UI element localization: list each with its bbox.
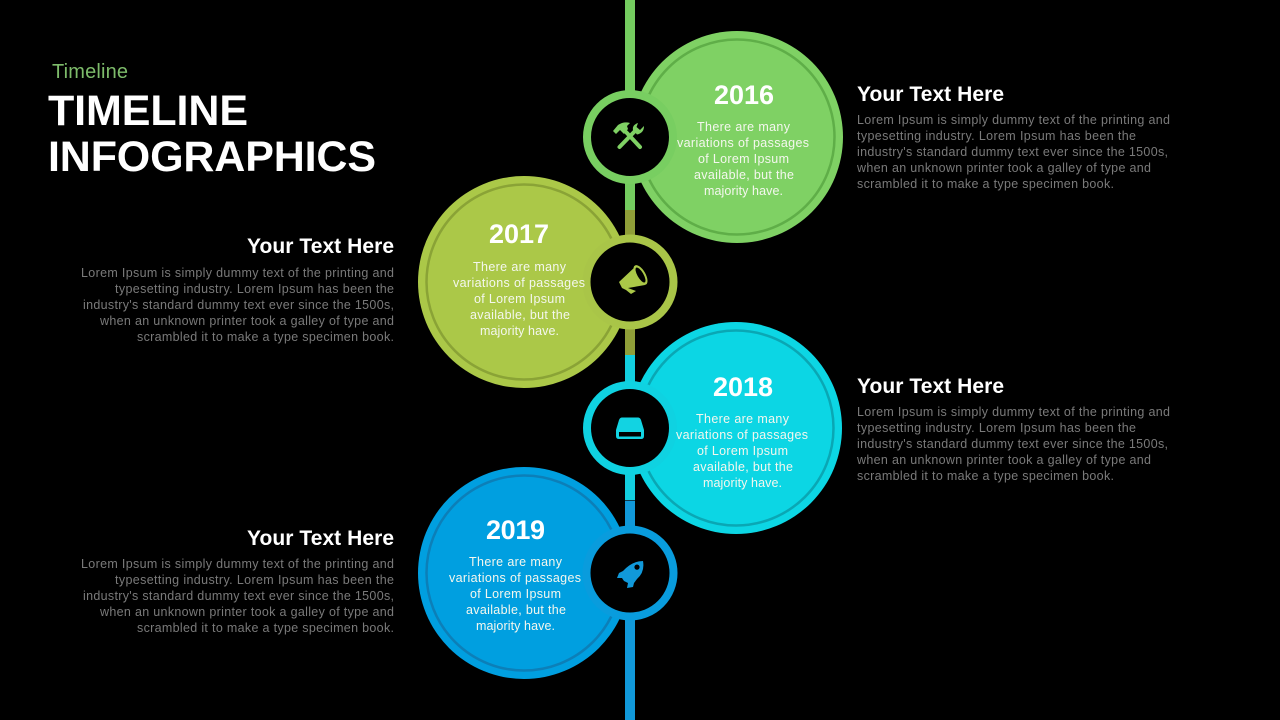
- circle text 2019: variations of passages: [449, 571, 581, 585]
- side text 2017: when an unknown printer took a galley of type and: [99, 314, 394, 328]
- side text 2018: Lorem Ipsum is simply dummy text of the printing and: [857, 405, 1170, 419]
- panel: 2016: [587, 31, 1170, 243]
- side text 2017: industry's standard dummy text ever since the 1500s,: [83, 298, 394, 312]
- large circle 2017: [418, 176, 630, 388]
- large circle 2016: [631, 31, 843, 243]
- icon: rocket: [617, 561, 643, 588]
- circle text 2018: variations of passages: [676, 428, 808, 442]
- circle text 2016: of Lorem Ipsum: [698, 152, 789, 166]
- eyebrow label: Timeline: [52, 61, 128, 83]
- icon ring 2016: [587, 94, 673, 180]
- icon ring 2019: [586, 530, 674, 616]
- side text 2016: Your Text Here: [857, 83, 1004, 106]
- circle text 2016: [677, 120, 809, 198]
- circle text 2017: majority have.: [480, 324, 559, 338]
- side text 2017: scrambled it to make a type specimen book.: [137, 330, 394, 344]
- circle text 2019: There are many: [469, 555, 563, 569]
- circle text 2017: variations of passages: [453, 276, 585, 290]
- circle text 2018: There are many: [696, 412, 790, 426]
- side text 2019: [81, 527, 394, 635]
- circle text 2018: [676, 412, 808, 490]
- circle text 2017: [453, 260, 585, 338]
- side text 2017: Your Text Here: [247, 235, 394, 258]
- side text 2016: typesetting industry. Lorem Ipsum has been the: [857, 129, 1136, 143]
- circle text 2019: majority have.: [476, 619, 555, 633]
- circle text 2017: There are many: [473, 260, 567, 274]
- circle text 2018: of Lorem Ipsum: [697, 444, 788, 458]
- year 2018: 2018: [713, 372, 773, 402]
- side text 2017: [81, 235, 394, 344]
- large circle 2018: [630, 322, 842, 534]
- large circle 2019: [418, 467, 630, 679]
- icon: storage drive: [616, 418, 644, 439]
- title block: INFOGRAPHICS: [48, 133, 376, 181]
- side text 2016: industry's standard dummy text ever since the 1500s,: [857, 145, 1168, 159]
- side text 2019: when an unknown printer took a galley of type and: [99, 605, 394, 619]
- side text 2016: scrambled it to make a type specimen book.: [857, 177, 1114, 191]
- side text 2017: Lorem Ipsum is simply dummy text of the printing and: [81, 266, 394, 280]
- side text 2019: scrambled it to make a type specimen book.: [137, 621, 394, 635]
- side text 2019: Lorem Ipsum is simply dummy text of the printing and: [81, 557, 394, 571]
- year 2017: 2017: [489, 219, 549, 249]
- year 2016: 2016: [714, 80, 774, 110]
- panel: 2018: [587, 322, 1170, 534]
- circle text 2016: majority have.: [704, 184, 783, 198]
- circle text 2016: available, but the: [694, 168, 794, 182]
- side text 2016: Lorem Ipsum is simply dummy text of the printing and: [857, 113, 1170, 127]
- side text 2018: typesetting industry. Lorem Ipsum has been the: [857, 421, 1136, 435]
- side text 2019: typesetting industry. Lorem Ipsum has been the: [115, 573, 394, 587]
- side text 2018: scrambled it to make a type specimen book.: [857, 469, 1114, 483]
- side text 2018: industry's standard dummy text ever since the 1500s,: [857, 437, 1168, 451]
- panel: 2019: [81, 467, 674, 679]
- icon ring 2018: [587, 385, 673, 471]
- side text 2019: Your Text Here: [247, 527, 394, 550]
- icon: megaphone: [619, 263, 650, 294]
- circle text 2016: There are many: [697, 120, 791, 134]
- circle text 2019: [449, 555, 581, 633]
- side text 2017: typesetting industry. Lorem Ipsum has been the: [115, 282, 394, 296]
- icon ring 2017: [586, 238, 674, 326]
- circle text 2017: available, but the: [470, 308, 570, 322]
- side text 2018: Your Text Here: [857, 375, 1004, 398]
- main heading: TIMELINE: [48, 87, 248, 135]
- circle text 2016: variations of passages: [677, 136, 809, 150]
- title block: [48, 61, 376, 181]
- panel: 2017: [81, 176, 674, 388]
- circle text 2019: of Lorem Ipsum: [470, 587, 561, 601]
- circle text 2018: available, but the: [693, 460, 793, 474]
- circle text 2017: of Lorem Ipsum: [474, 292, 565, 306]
- year 2019: 2019: [486, 515, 545, 545]
- side text 2016: when an unknown printer took a galley of type and: [856, 161, 1151, 175]
- side text 2016: [856, 83, 1170, 191]
- side text 2018: [856, 375, 1170, 483]
- circle text 2018: majority have.: [703, 476, 782, 490]
- vertical timeline line: [625, 0, 635, 720]
- icon: hammer and wrench: [613, 122, 644, 147]
- circle text 2019: available, but the: [466, 603, 566, 617]
- side text 2019: industry's standard dummy text ever since the 1500s,: [83, 589, 394, 603]
- side text 2018: when an unknown printer took a galley of type and: [856, 453, 1151, 467]
